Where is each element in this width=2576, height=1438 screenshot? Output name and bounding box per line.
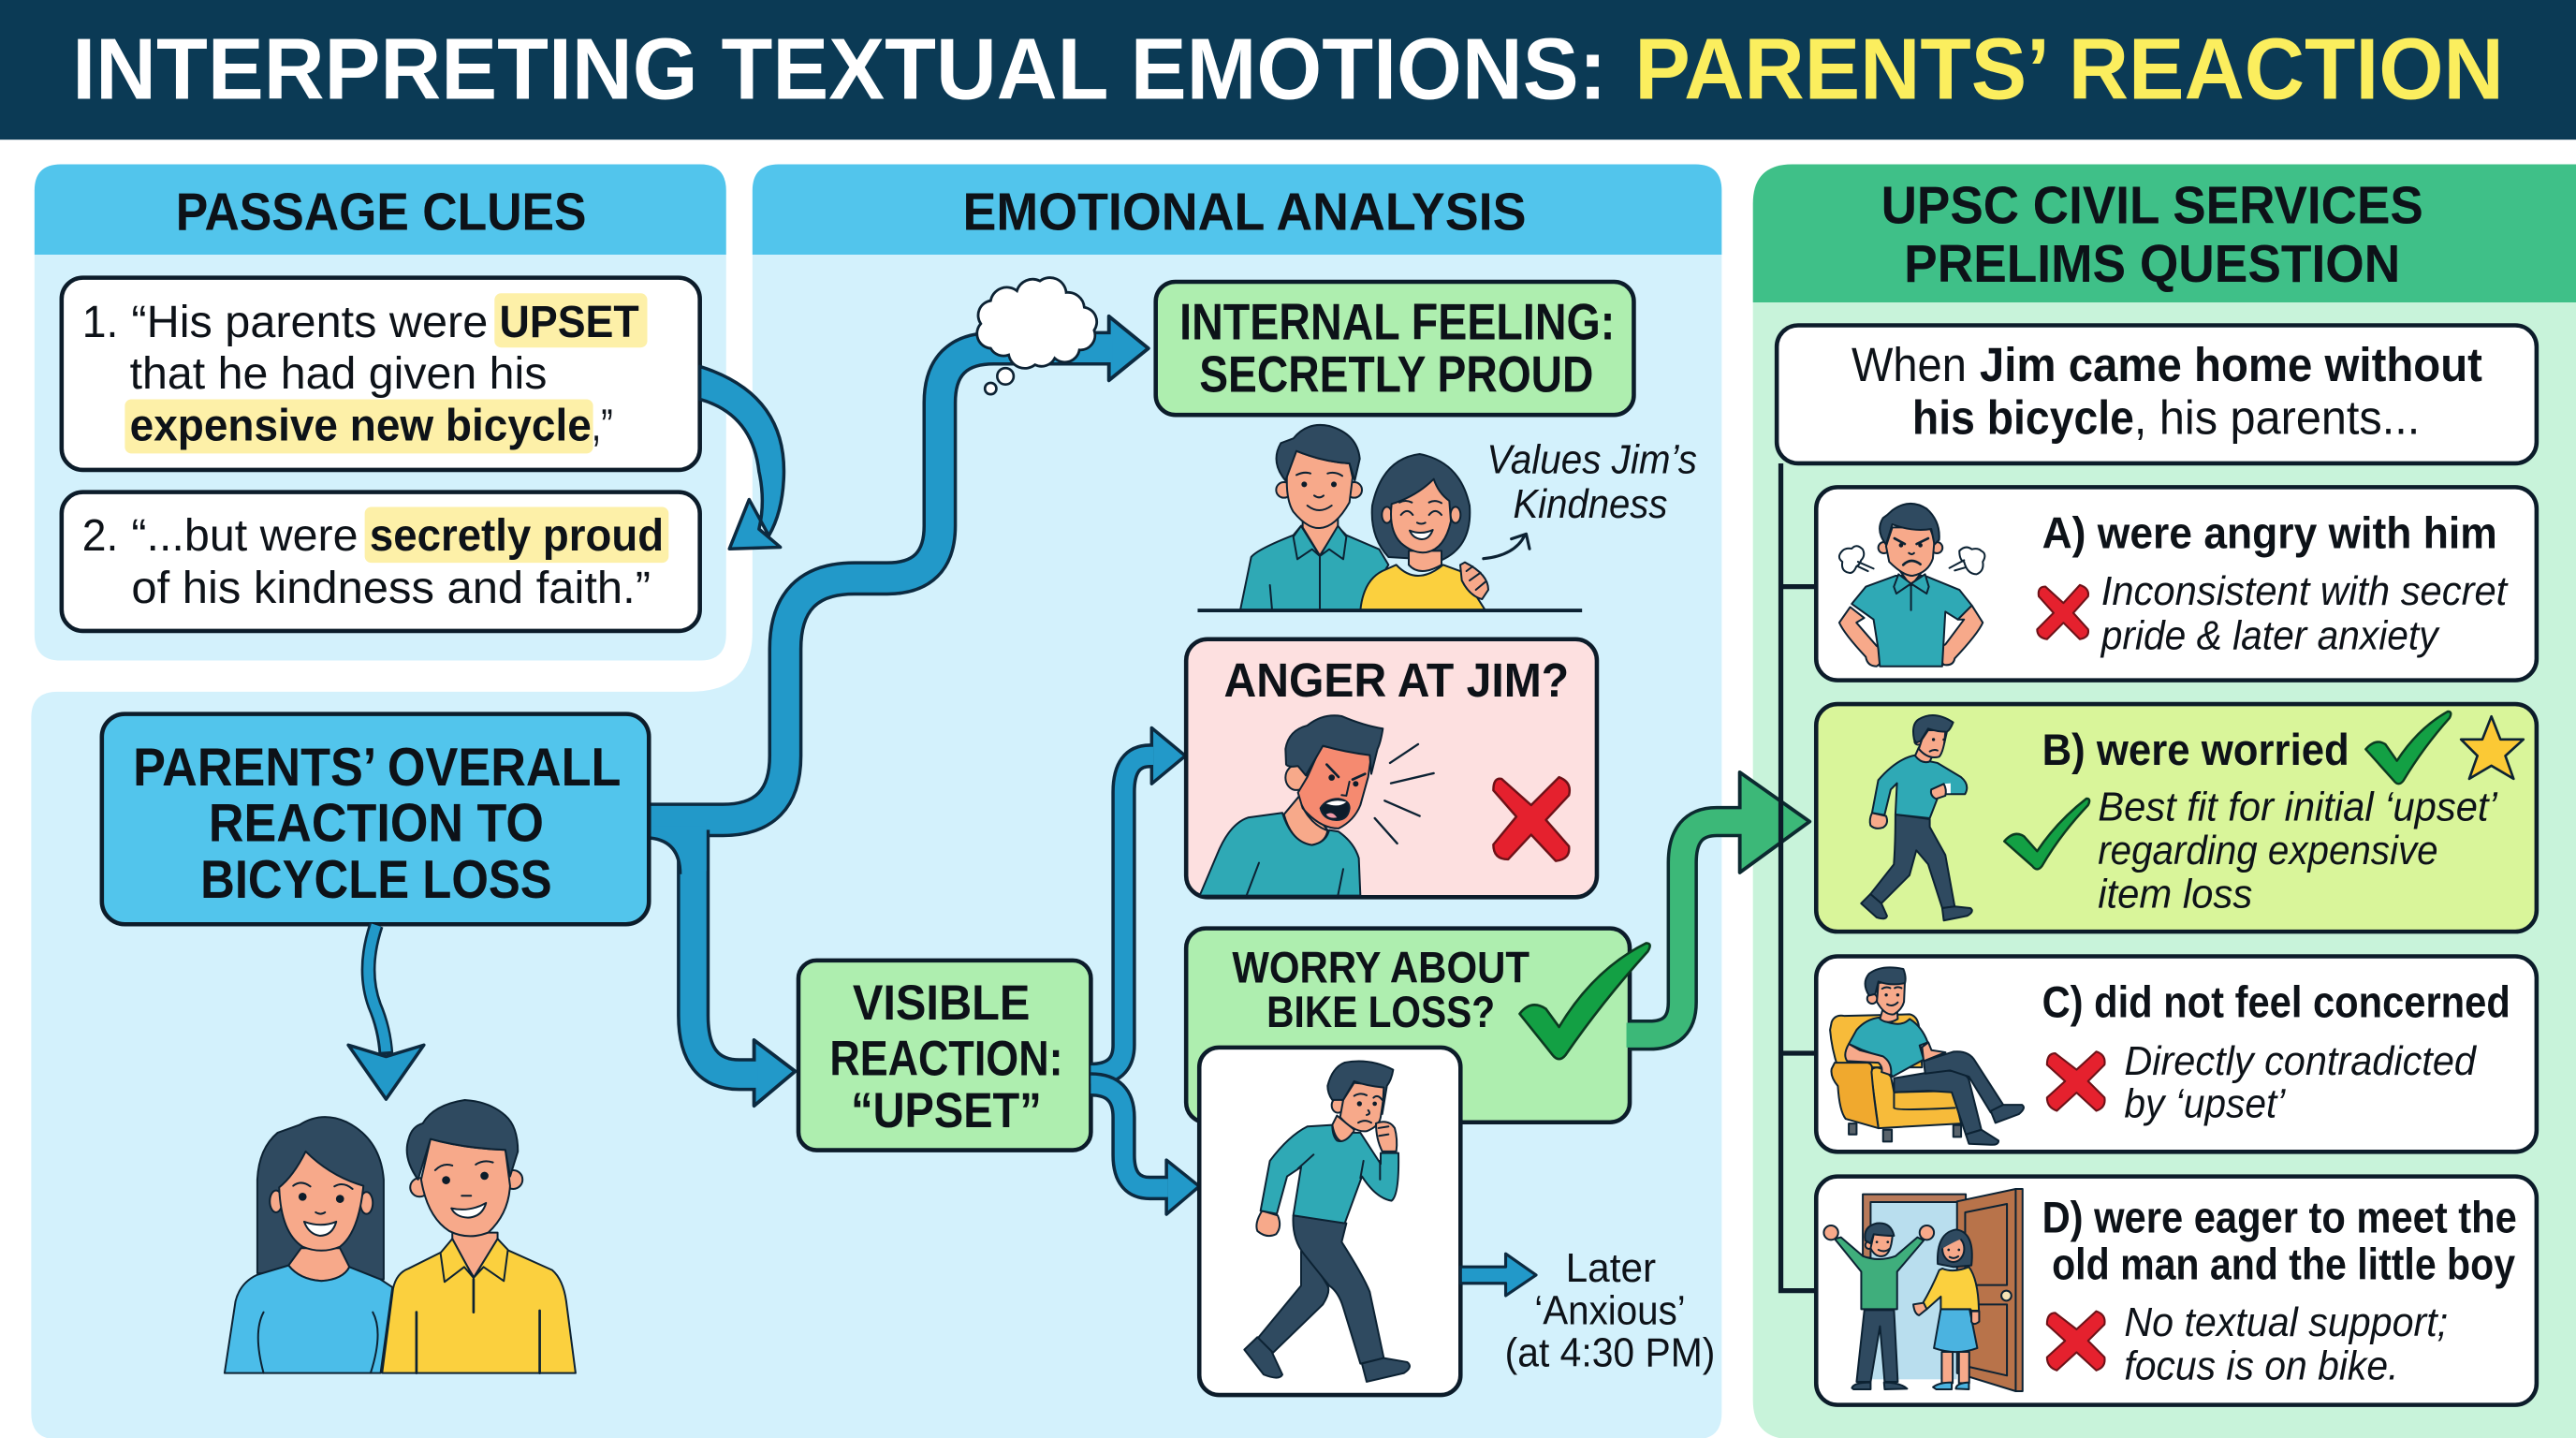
- option d: D) were eager to meet the: [2042, 1193, 2517, 1242]
- option b: B) were worried: [2042, 726, 2349, 775]
- arrow: worry to answer b: [1627, 772, 1809, 1035]
- option d: focus is on bike.: [2124, 1343, 2398, 1388]
- arrow: clue 1 to clue 2: [700, 366, 783, 549]
- title banner: PARENTS’ REACTION: [1634, 20, 2504, 117]
- clue 1: [62, 278, 700, 470]
- clue 1: expensive new bicycle: [130, 400, 592, 450]
- icon: red cross: [2047, 1312, 2105, 1371]
- panel: emotional analysis: [31, 165, 1721, 1438]
- internal feeling box: [1156, 282, 1633, 415]
- icon: couple at open door: [1823, 1189, 2023, 1391]
- option c: Directly contradicted: [2124, 1038, 2477, 1084]
- icon: proud parents: [1240, 425, 1488, 610]
- icon: thought cloud: [977, 278, 1097, 394]
- heading: upsc question: PRELIMS QUESTION: [1904, 234, 2400, 293]
- panel: passage clues: [35, 165, 726, 661]
- worried walking man card: [1199, 1048, 1460, 1395]
- option a: pride & later anxiety: [2100, 612, 2440, 658]
- worry box: BIKE LOSS?: [1266, 988, 1495, 1037]
- question box: Jim came home without: [1980, 338, 2482, 391]
- clue 2: “...but were: [131, 510, 359, 561]
- overall reaction box: PARENTS’ OVERALL: [133, 738, 621, 798]
- icon: angry man shouting: [1200, 715, 1434, 896]
- icon: green check: [2365, 712, 2451, 784]
- option d: No textual support;: [2124, 1299, 2448, 1345]
- clue 1: 1.: [82, 297, 118, 347]
- arrow: overall reaction to internal feeling: [648, 316, 1149, 820]
- caption: later anxious: [1505, 1245, 1715, 1375]
- icon: angry man arms on hips: [1839, 504, 1984, 667]
- option a: A) were angry with him: [2042, 508, 2497, 558]
- panel: upsc question: [1753, 165, 2576, 1438]
- overall reaction box: REACTION TO: [209, 794, 544, 854]
- clue 1: UPSET: [500, 297, 639, 347]
- arrow: overall reaction to parents: [348, 925, 424, 1099]
- clue 1: “His parents were: [131, 297, 488, 347]
- overall reaction box: BICYCLE LOSS: [200, 850, 552, 910]
- worry box: WORRY ABOUT: [1232, 944, 1530, 993]
- icon: man relaxing in armchair: [1830, 967, 2024, 1145]
- title banner: INTERPRETING TEXTUAL EMOTIONS:: [72, 20, 1606, 117]
- clue 2: [62, 492, 700, 631]
- overall reaction box: [102, 714, 649, 924]
- caption: later anxious: (at 4:30 PM): [1505, 1329, 1715, 1375]
- clue 2: secretly proud: [370, 510, 664, 561]
- clue 1: ,”: [592, 400, 613, 450]
- icon: red cross: [2037, 585, 2088, 639]
- arrow: later anxious: [1460, 1254, 1536, 1296]
- question box: When: [1852, 338, 1967, 391]
- caption: values jim's kindness: Values Jim’s: [1486, 436, 1697, 482]
- option b: Best fit for initial ‘upset’: [2098, 785, 2498, 830]
- icon: gold star: [2461, 716, 2524, 779]
- heading: upsc question: [1881, 176, 2423, 293]
- visible reaction box: VISIBLE: [853, 976, 1030, 1031]
- title banner: [0, 0, 2576, 139]
- heading: upsc question: UPSC CIVIL SERVICES: [1881, 176, 2423, 235]
- anger box: [1186, 639, 1597, 897]
- icon: red cross: [2047, 1051, 2105, 1110]
- option a: Inconsistent with secret: [2101, 568, 2509, 614]
- icon: green check: [2004, 799, 2089, 869]
- clue 2: 2.: [82, 510, 118, 561]
- option c: [1816, 956, 2537, 1152]
- heading: passage clues: PASSAGE CLUES: [176, 183, 587, 242]
- clue 1: that he had given his: [130, 348, 547, 399]
- option a: [1816, 487, 2537, 681]
- heading: emotional analysis: EMOTIONAL ANALYSIS: [962, 183, 1526, 242]
- arrow: overall reaction to visible reaction: [651, 822, 795, 1106]
- question box: , his parents...: [2134, 390, 2420, 444]
- caption: later anxious: ‘Anxious’: [1534, 1288, 1686, 1334]
- option b: [1816, 704, 2537, 932]
- caption: values jim's kindness: [1484, 436, 1697, 559]
- icon: smiling parents: [225, 1100, 576, 1373]
- icon: worried walking man: [1244, 1062, 1410, 1382]
- option d: old man and the little boy: [2052, 1240, 2516, 1289]
- floor line: [1197, 609, 1582, 611]
- option b: item loss: [2098, 872, 2252, 917]
- caption: values jim's kindness: Kindness: [1513, 481, 1667, 527]
- visible reaction box: REACTION:: [829, 1032, 1063, 1087]
- internal feeling box: SECRETLY PROUD: [1199, 346, 1593, 404]
- visible reaction box: [798, 961, 1090, 1151]
- arrow: visible reaction to worry: [1090, 1084, 1199, 1214]
- icon: walking man checking watch: [1861, 715, 1972, 920]
- option c: C) did not feel concerned: [2042, 977, 2510, 1027]
- visible reaction box: “UPSET”: [851, 1083, 1042, 1138]
- question box: his bicycle: [1912, 390, 2134, 444]
- option d: [1816, 1177, 2537, 1405]
- clue 2: of his kindness and faith.”: [131, 563, 651, 613]
- icon: green check on worry box: [1519, 943, 1650, 1059]
- option c: by ‘upset’: [2124, 1080, 2287, 1126]
- connector: question to options: [1781, 463, 1817, 1291]
- question box: [1777, 326, 2537, 463]
- internal feeling box: INTERNAL FEELING:: [1179, 293, 1615, 350]
- arrow: visible reaction to anger: [1090, 728, 1185, 1075]
- option b: regarding expensive: [2098, 828, 2438, 873]
- heading: anger at jim: ANGER AT JIM?: [1224, 653, 1569, 707]
- icon: red cross: [1493, 777, 1570, 861]
- caption: later anxious: Later: [1566, 1245, 1656, 1291]
- worry box: [1186, 929, 1630, 1123]
